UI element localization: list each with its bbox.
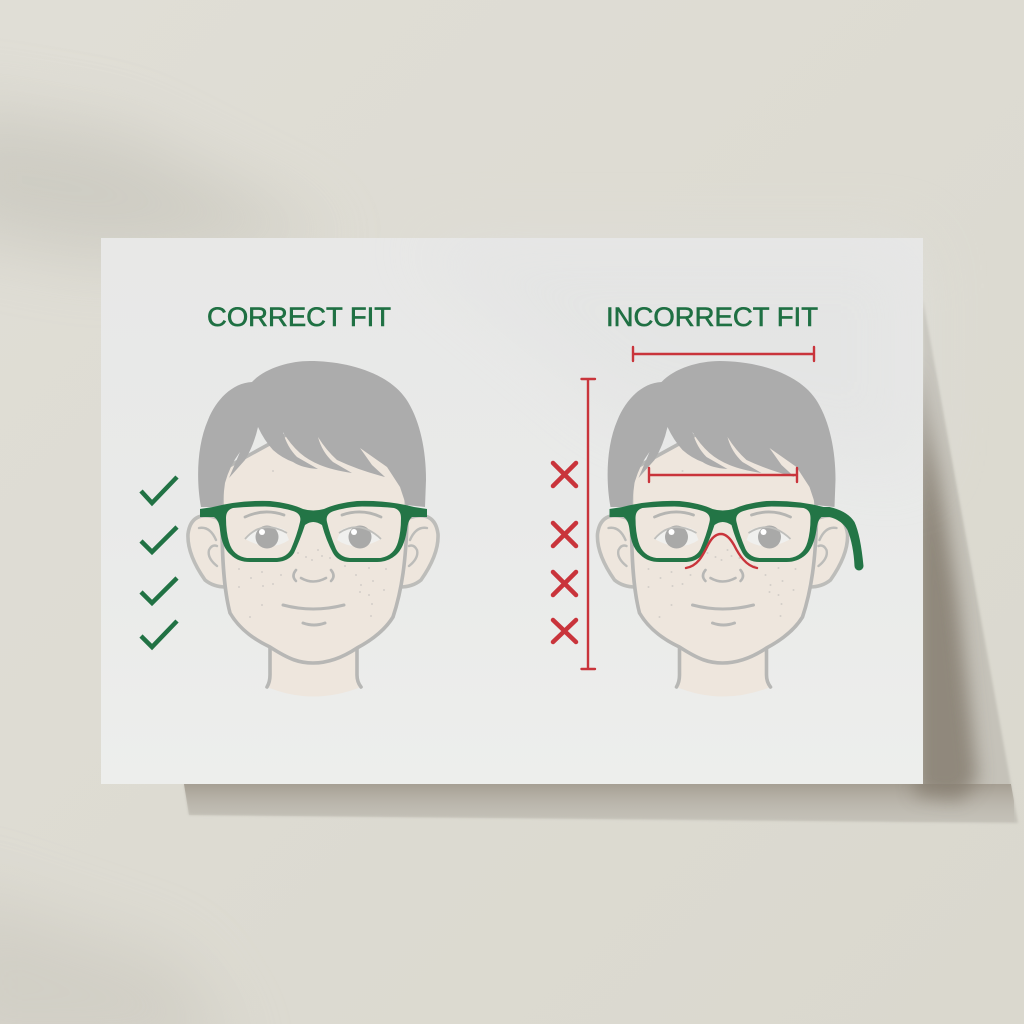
check 3 [141, 578, 177, 603]
width measure line [633, 347, 814, 361]
eyes [245, 527, 381, 546]
hair [198, 361, 426, 507]
check marks [141, 477, 177, 647]
neck [676, 640, 770, 696]
face: incorrect fit [597, 361, 864, 696]
ears [597, 516, 848, 587]
check 2 [141, 527, 177, 552]
mouth [283, 605, 344, 625]
freckles [238, 470, 387, 618]
glasses: incorrect fit [610, 501, 864, 570]
hair [608, 361, 836, 507]
check 1 [141, 477, 177, 503]
neck [267, 640, 361, 696]
cross 3 [553, 572, 576, 595]
check 4 [141, 621, 177, 647]
paper panel [101, 238, 923, 784]
nose [294, 570, 334, 582]
callout: red fit annotations [553, 347, 814, 669]
ears [188, 516, 438, 587]
height measure line [582, 379, 595, 669]
freckles [648, 470, 796, 618]
face shape [222, 420, 407, 663]
cross 4 [553, 620, 576, 642]
nose pad curve [686, 534, 757, 568]
eyes [654, 527, 790, 546]
cast shadow [184, 300, 1018, 823]
heading: incorrect fit: INCORRECT FIT [606, 302, 818, 332]
face shape [632, 420, 816, 663]
nose [703, 570, 743, 582]
mouth [692, 605, 754, 625]
cross 1 [553, 463, 576, 486]
cross 2 [553, 523, 576, 546]
heading: correct fit: CORRECT FIT [207, 302, 391, 332]
face: correct fit [188, 361, 438, 696]
forehead measure line [649, 468, 797, 482]
glasses: correct fit [200, 501, 427, 562]
